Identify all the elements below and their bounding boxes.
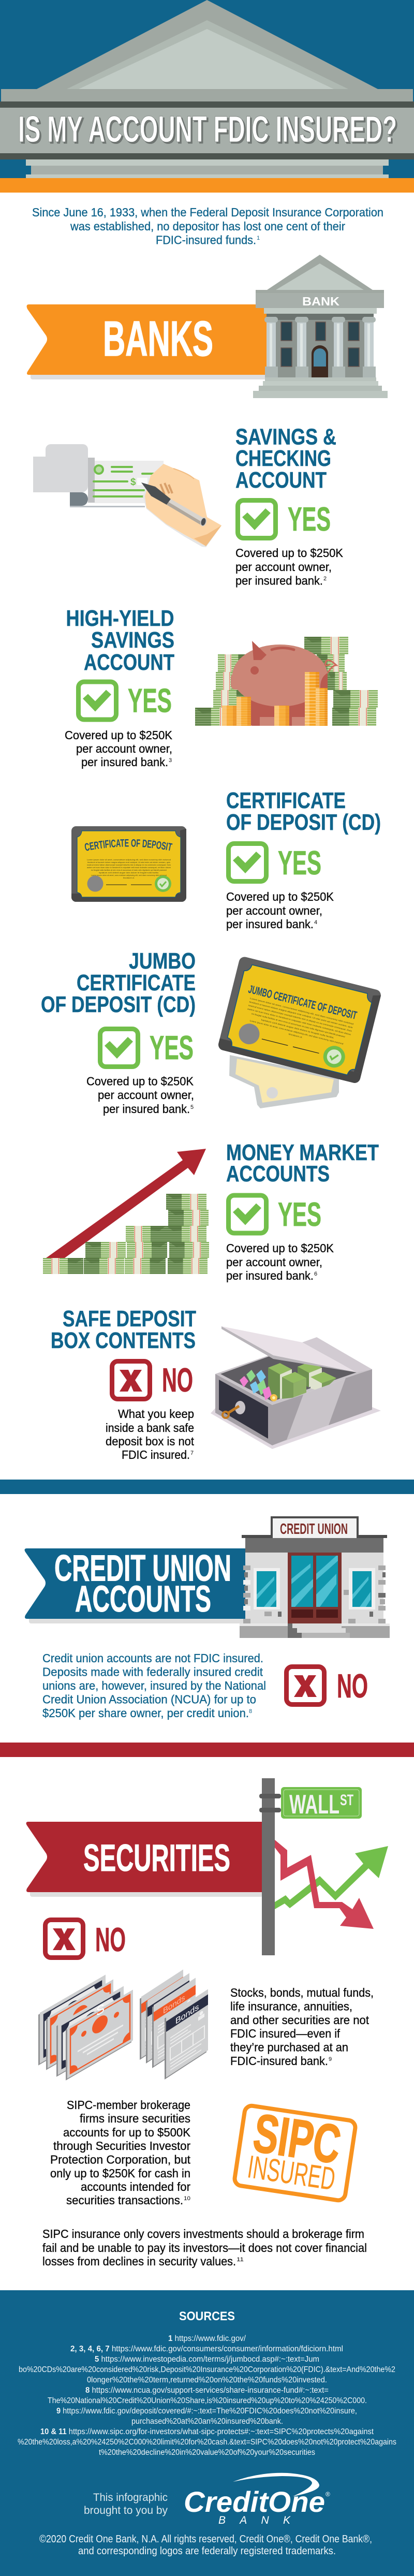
logo: credit one bank: CreditOne — [184, 2485, 325, 2518]
heading: jumbo certificate of deposit: JUMBO — [129, 949, 196, 974]
credit union text: 8 — [249, 1708, 252, 1715]
heading: high-yield — [66, 606, 174, 675]
illustration: bond documents: Bonds — [175, 2001, 199, 2026]
sources list: 1 https://www.fdic.gov/ — [168, 2334, 246, 2343]
no label: NO — [162, 1361, 193, 1399]
illustration: hand writing a check — [33, 444, 221, 547]
illustration: market lines — [275, 1840, 388, 1929]
heading: high-yield: SAVINGS — [91, 628, 174, 653]
securities text: FDIC-insured bank. — [230, 2054, 328, 2068]
illustration: bank building — [253, 255, 388, 398]
illustration: jumbo certificate — [217, 956, 382, 1108]
illustration: jumbo certificate: eu feugiat nulla facilisis at vero eros et accumsan et iusto odio dignissim qui blandit praesent — [252, 1012, 346, 1038]
credit union text: $250K per share owner, per credit union. — [42, 1706, 249, 1720]
illustration: jumbo certificate: tincidunt ut. — [288, 1033, 303, 1038]
sources list: The%20National%20Credit%20Union%20Share,is%20insured%20up%20to%20%24250%2C000. — [48, 2396, 367, 2405]
red divider band — [0, 1743, 414, 1757]
yes label: YES — [288, 500, 331, 538]
yes label: YES — [278, 844, 321, 882]
illustration: certificate of deposit: luptatum zzril delenit augue duis dolore te feugait nulla facilisi. — [99, 871, 159, 874]
heading: money market accounts: MONEY MARKET — [226, 1140, 379, 1165]
no label: NO — [337, 1667, 368, 1705]
illustration: certificate of deposit: eu feugiat nulla facilisis at vero eros et accumsan et iusto odio dignissim qui blandit praesent — [91, 869, 167, 871]
illustration: bond documents — [140, 1969, 208, 2080]
sources list: purchased%20at%20an%20insured%20bank. — [131, 2417, 283, 2426]
illustration: piggy bank with money — [195, 637, 378, 726]
illustration: certificate of deposit: Lorem ipsum dolor sit amet, cons ectetuer adipiscing elit, sed diam nonummy nibh euismod — [91, 874, 167, 876]
coverage text: 5 — [190, 1104, 194, 1110]
sources list: t%20the%20decline%20in%20value%20of%20your%20securities — [99, 2448, 315, 2457]
coverage text: 2 — [323, 576, 327, 582]
intro text: FDIC-insured funds. — [156, 233, 256, 246]
illustration: wall street sign: ST — [340, 1792, 353, 1809]
sipc note: fail and be unable to pay its investors—it does not cover financial — [42, 2241, 367, 2255]
heading: certificate of deposit: CERTIFICATE — [226, 788, 346, 813]
sipc member text: SIPC-member brokerage — [67, 2098, 190, 2112]
brought by text: brought to you by — [84, 2505, 168, 2516]
heading: accounts: ACCOUNTS — [75, 1579, 211, 1620]
yes label: YES — [128, 681, 172, 720]
heading: credit union: CREDIT UNION — [54, 1548, 231, 1589]
illustration: stock certificates: S — [96, 2001, 105, 2019]
illustration: certificate of deposit — [71, 826, 186, 902]
credit union text: unions are, however, insured by the National — [42, 1679, 266, 1692]
illustration: jumbo certificate: Lorem ipsum dolor sit amet, cons ectetuer adipiscing elit, sed diam nonummy nibh euismod — [249, 1019, 344, 1045]
illustration: jumbo certificate: nostrud exerci tation ullamcorper suscipit lobortis nisl ut aliquip ex ea commodo consequat. Duis — [248, 1004, 352, 1032]
securities text: FDIC insured—even if — [230, 2027, 341, 2040]
illustration: jumbo certificate: Lorem ipsum dolor sit amet, consectetuer adipiscing elit, sed diam nonummy nibh euismod — [250, 997, 354, 1025]
heading: jumbo certificate of deposit: OF DEPOSIT (CD) — [41, 992, 196, 1017]
sources list: 9 https://www.fdic.gov/deposit/covered/#:~:text=The%20FDIC%20does%20not%20insure, — [56, 2407, 357, 2416]
heading: securities: SECURITIES — [83, 1837, 230, 1879]
illustration: certificate of deposit: nostrud exerci tation ullamcorper suscipit lobortis nisl ut aliquip ex ea commodo consequat. Duis — [87, 863, 171, 866]
sipc member text: accounts for up to $500K — [63, 2126, 191, 2139]
illustration: wall street sign: WALL — [289, 1790, 339, 1820]
sipc note: 11 — [236, 2257, 244, 2263]
icon: check — [229, 1195, 266, 1233]
logo: credit one bank: ® — [326, 2491, 330, 2498]
logo: credit one bank: BANK — [218, 2514, 291, 2526]
safe deposit text: 7 — [190, 1450, 194, 1456]
footer background — [0, 2290, 414, 2576]
coverage text: Covered up to $250K — [235, 546, 344, 560]
copyright: ©2020 Credit One Bank, N.A. All rights reserved, Credit One®, Credit One Bank®, — [39, 2534, 372, 2545]
icon: x — [287, 1667, 324, 1704]
illustration: credit union building: CREDIT UNION — [280, 1521, 348, 1538]
coverage text — [235, 546, 344, 587]
intro text: was established, no depositor has lost one cent of their — [70, 219, 345, 233]
heading: jumbo certificate of deposit: CERTIFICATE — [77, 971, 196, 996]
illustration: jumbo certificate: tincidunt ut laoreet dolore magna aliquam erat volutpat. Ut wisi enim ad minim veniam, quis — [249, 1000, 353, 1029]
safe deposit text: inside a bank safe — [106, 1421, 194, 1435]
coverage text — [65, 728, 173, 769]
coverage text: per insured bank. — [226, 917, 314, 931]
brought by text: This infographic — [93, 2492, 168, 2504]
illustration: jumbo certificate: autem vel eum iriure dolor in hendrerit in vulputate velit esse molestie consequat, vel illum dolore — [247, 1007, 352, 1036]
heading: safe deposit box contents: BOX CONTENTS — [51, 1328, 196, 1353]
illustration: certificate of deposit: tincidunt ut. — [123, 876, 135, 879]
stamp: sipc insured: SIPC — [249, 2103, 345, 2175]
yes label: YES — [150, 1029, 194, 1066]
heading: money market accounts — [226, 1140, 379, 1187]
illustration: certificate of deposit: CERTIFICATE OF DEPOSIT — [85, 839, 173, 851]
illustration: bond documents: Bonds — [163, 1993, 185, 2016]
illustration: certificate of deposit: tincidunt ut laoreet dolore magna aliquam erat volutpat. Ut wisi enim ad minim veniam, quis — [87, 861, 170, 863]
illustration: rising arrow over money stacks — [43, 1149, 209, 1274]
securities text — [230, 1986, 374, 2068]
heading: savings and checking: CHECKING — [235, 446, 331, 471]
securities text: 9 — [329, 2056, 332, 2062]
icon: check — [79, 682, 116, 720]
sources list: 5 https://www.investopedia.com/terms/j/jumbocd.asp#:~:text=Jum — [95, 2355, 319, 2364]
icon: x — [112, 1362, 150, 1399]
illustration: safe deposit box — [211, 1326, 381, 1449]
heading: savings and checking — [235, 425, 336, 493]
coverage text: 3 — [169, 757, 172, 764]
sources heading: SOURCES — [179, 2309, 235, 2323]
illustration: bond documents: Bonds — [157, 1988, 179, 2011]
coverage text: per insured bank. — [226, 1269, 314, 1282]
credit union text: Credit Union Association (NCUA) for up to — [42, 1693, 256, 1706]
blue divider band — [0, 1480, 414, 1494]
illustration: credit union building — [240, 1516, 390, 1638]
copyright: and corresponding logos are federally registered trademarks. — [78, 2545, 336, 2557]
coverage text: 6 — [314, 1271, 317, 1277]
intro text — [32, 206, 383, 246]
copyright — [39, 2534, 372, 2557]
sources list: 0longer%20the%20term,returned%20on%20the%20funds%20invested. — [87, 2376, 327, 2384]
heading: safe deposit box contents — [51, 1307, 196, 1353]
coverage text: 4 — [314, 919, 317, 926]
securities text: and other securities are not — [230, 2013, 369, 2027]
coverage text: per account owner, — [235, 560, 332, 574]
heading: certificate of deposit — [226, 788, 381, 835]
safe deposit text: FDIC insured. — [122, 1448, 190, 1461]
illustration: bond documents: Bonds — [151, 1985, 173, 2008]
heading: high-yield: ACCOUNT — [84, 650, 174, 675]
coverage text: per account owner, — [98, 1088, 194, 1102]
heading: certificate of deposit: OF DEPOSIT (CD) — [226, 810, 381, 835]
coverage text: Covered up to $250K — [226, 890, 334, 903]
coverage text: Covered up to $250K — [65, 728, 173, 742]
stamp: sipc insured — [234, 2101, 357, 2201]
icon: x — [46, 1920, 83, 1958]
illustration: wall street sign — [259, 1778, 362, 1955]
coverage text — [86, 1075, 194, 1116]
illustration: bank building: BANK — [302, 295, 339, 308]
sources list: 2, 3, 4, 6, 7 https://www.fdic.gov/consumers/consumer/information/fdiciorn.html — [70, 2345, 343, 2353]
banner: credit union accounts — [25, 1548, 246, 1623]
coverage text: per account owner, — [226, 1255, 322, 1269]
sources list: 8 https://www.ncua.gov/support-services/share-insurance-fund#:~:text= — [85, 2386, 329, 2395]
coverage text: per insured bank. — [103, 1102, 190, 1116]
illustration: certificate of deposit: autem vel eum iriure dolor in hendrerit in vulputate velit esse molestie consequat, vel illum dolore — [87, 866, 171, 869]
yes label: YES — [278, 1195, 321, 1233]
sipc note — [42, 2227, 367, 2268]
credit union text: Credit union accounts are not FDIC insured. — [42, 1651, 263, 1665]
illustration: stock certificates — [38, 1974, 133, 2081]
intro text: 1 — [257, 235, 260, 241]
icon: check — [100, 1029, 138, 1066]
coverage text: per insured bank. — [81, 755, 168, 769]
icon: check — [238, 500, 275, 538]
header: bank roof and title band — [0, 0, 414, 178]
stamp: sipc insured: INSURED — [245, 2149, 337, 2198]
heading: savings and checking: ACCOUNT — [235, 468, 327, 493]
securities text: Stocks, bonds, mutual funds, — [230, 1986, 374, 1999]
heading: savings and checking: SAVINGS & — [235, 425, 336, 449]
sipc member text: Protection Corporation, but — [50, 2153, 191, 2166]
sources list: 10 & 11 https://www.sipc.org/for-investors/what-sipc-protects#:~:text=SIPC%20protects%20against — [40, 2427, 374, 2436]
safe deposit text — [106, 1407, 195, 1461]
coverage text: Covered up to $250K — [226, 1241, 334, 1255]
brought by text — [84, 2492, 168, 2516]
faded back certificate — [229, 1055, 339, 1108]
coverage text — [226, 890, 334, 931]
coverage text: Covered up to $250K — [86, 1075, 194, 1088]
safe deposit text: What you keep — [118, 1407, 194, 1421]
coverage text: per insured bank. — [235, 574, 323, 587]
illustration: hand writing a check: $ — [130, 477, 136, 488]
sipc member text: through Securities Investor — [53, 2139, 190, 2153]
heading: safe deposit box contents: SAFE DEPOSIT — [63, 1307, 196, 1331]
heading: jumbo certificate of deposit — [41, 949, 196, 1017]
sipc member text: securities transactions. — [66, 2193, 183, 2207]
credit union text — [42, 1651, 266, 1720]
orange band — [0, 178, 414, 193]
coverage text: per account owner, — [76, 742, 172, 755]
coverage text: per account owner, — [226, 904, 322, 917]
heading: banks: BANKS — [103, 311, 213, 367]
heading: money market accounts: ACCOUNTS — [226, 1162, 330, 1187]
logo: credit one bank — [184, 2473, 330, 2526]
sipc member text: accounts intended for — [81, 2180, 190, 2193]
sipc member text: firms insure securities — [80, 2112, 190, 2125]
sipc note: SIPC insurance only covers investments should a brokerage firm — [42, 2227, 364, 2241]
icon: check — [229, 844, 266, 881]
intro text: Since June 16, 1933, when the Federal Deposit Insurance Corporation — [32, 206, 383, 219]
securities text: they’re purchased at an — [230, 2041, 348, 2054]
coverage text — [226, 1241, 334, 1282]
safe deposit text: deposit box is not — [106, 1435, 195, 1448]
sipc member text: 10 — [184, 2196, 190, 2202]
no label: NO — [95, 1921, 126, 1958]
banner: securities — [26, 1822, 263, 1897]
sipc note: losses from declines in security values. — [42, 2255, 236, 2268]
illustration: certificate of deposit: Lorem ipsum dolor sit amet, consectetuer adipiscing elit, sed diam nonummy nibh euismod — [87, 858, 171, 861]
heading: high-yield: HIGH-YIELD — [66, 606, 174, 631]
banner: banks — [27, 304, 267, 379]
illustration: jumbo certificate: luptatum zzril delenit augue duis dolore te feugait nulla facilisi. — [261, 1018, 334, 1039]
securities text: life insurance, annuities, — [230, 1999, 352, 2013]
header background — [0, 0, 414, 178]
sources list — [18, 2334, 396, 2457]
credit union text: Deposits made with federally insured credit — [42, 1665, 263, 1678]
sipc member text — [50, 2098, 191, 2207]
sipc member text: only up to $250K for cash in — [50, 2167, 190, 2180]
